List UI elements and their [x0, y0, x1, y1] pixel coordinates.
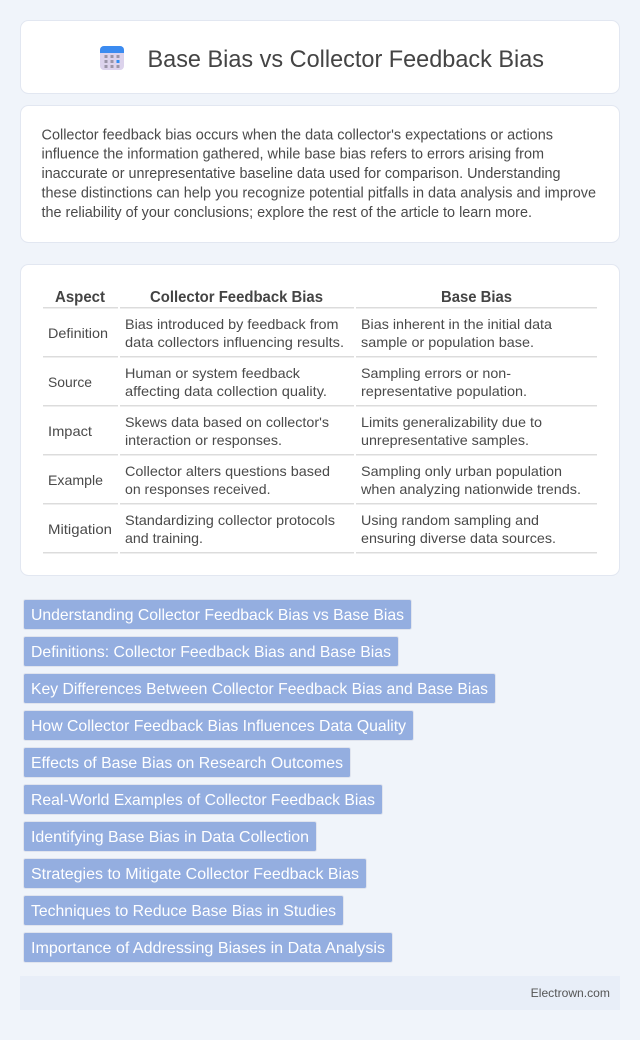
- row: mitigation: [48, 512, 556, 546]
- row: example: Collector alters questions based: [125, 463, 330, 479]
- topic chip 7: [24, 822, 316, 852]
- title: Base Bias vs Collector Feedback Bias: [148, 46, 544, 73]
- row: mitigation: Mitigation: [48, 521, 112, 537]
- row: source: Sampling errors or non-: [361, 365, 511, 381]
- row: example: on responses received.: [125, 481, 270, 497]
- topic chip 4: [24, 710, 414, 740]
- row: mitigation: ensuring diverse data sources.: [361, 530, 556, 546]
- topic chip 10: [24, 932, 392, 962]
- intro paragraph: inaccurate or unrepresentative baseline data used for comparison. Understanding: [42, 166, 560, 182]
- intro paragraph: the reliability of your conclusions; explore the rest of the article to learn more.: [42, 205, 532, 221]
- row: impact: [48, 414, 542, 448]
- row: example: when analyzing nationwide trends.: [360, 481, 581, 497]
- row: definition: Bias introduced by feedback from: [125, 316, 338, 332]
- panel: comparison table: [20, 264, 620, 576]
- row: mitigation: and training.: [125, 530, 203, 546]
- topic chip 2: [24, 636, 398, 666]
- topic chip 5: [24, 748, 350, 778]
- row: impact: Skews data based on collector's: [125, 414, 329, 430]
- topic chip 4: How Collector Feedback Bias Influences Data Quality: [31, 718, 406, 735]
- table header row: Aspect: [55, 289, 106, 306]
- table header row: Base Bias: [441, 289, 512, 306]
- topic chip 1: Understanding Collector Feedback Bias vs Base Bias: [31, 607, 404, 624]
- row: impact: Limits generalizability due to: [361, 414, 542, 430]
- row: example: Sampling only urban population: [361, 463, 562, 479]
- row: example: [48, 463, 581, 497]
- icon: calendar: [100, 46, 124, 70]
- topic chip 10: Importance of Addressing Biases in Data Analysis: [31, 940, 385, 957]
- row: mitigation: Using random sampling and: [361, 512, 539, 528]
- row: impact: interaction or responses.: [125, 432, 282, 448]
- row: source: Human or system feedback: [125, 365, 301, 381]
- topic list: [24, 600, 496, 962]
- intro paragraph: these distinctions can help you recognize potential pitfalls in data analysis and improve: [42, 186, 596, 202]
- row: example: Example: [48, 472, 103, 488]
- topic chip 8: [24, 858, 366, 888]
- row: source: representative population.: [361, 383, 527, 399]
- topic chip 6: [24, 784, 382, 814]
- footer credit: Electrown.com: [531, 986, 610, 1000]
- row: definition: data collectors influencing results.: [125, 334, 344, 350]
- panel: header: [20, 20, 620, 94]
- topic chip 2: Definitions: Collector Feedback Bias and Base Bias: [31, 644, 391, 661]
- row: definition: sample or population base.: [361, 334, 534, 350]
- row: mitigation: Standardizing collector protocols: [125, 512, 335, 528]
- row: definition: [48, 316, 552, 350]
- intro paragraph: Collector feedback bias occurs when the data collector's expectations or actions: [42, 127, 553, 143]
- topic chip 3: [24, 674, 496, 704]
- intro paragraph: [42, 127, 596, 221]
- table header row: [55, 289, 512, 306]
- topic chip 8: Strategies to Mitigate Collector Feedback Bias: [31, 866, 359, 883]
- topic chip 6: Real-World Examples of Collector Feedback Bias: [31, 792, 375, 809]
- panel: introduction: [20, 106, 620, 242]
- row: definition: Bias inherent in the initial data: [361, 316, 552, 332]
- topic chip 5: Effects of Base Bias on Research Outcomes: [31, 755, 343, 772]
- row: impact: unrepresentative samples.: [361, 432, 529, 448]
- row: definition: Definition: [48, 325, 108, 341]
- row: source: affecting data collection quality.: [125, 383, 327, 399]
- topic chip 9: Techniques to Reduce Base Bias in Studies: [31, 903, 336, 920]
- footer: [20, 976, 620, 1010]
- topic chip 3: Key Differences Between Collector Feedback Bias and Base Bias: [31, 681, 488, 698]
- topic chip 9: [24, 896, 344, 926]
- row: impact: Impact: [48, 423, 92, 439]
- table header row: Collector Feedback Bias: [150, 289, 323, 306]
- row: source: Source: [48, 374, 92, 390]
- topic chip 1: [24, 600, 412, 630]
- intro paragraph: influence the information gathered, while base bias refers to errors arising from: [42, 147, 544, 163]
- row: source: [48, 365, 527, 399]
- topic chip 7: Identifying Base Bias in Data Collection: [31, 829, 309, 846]
